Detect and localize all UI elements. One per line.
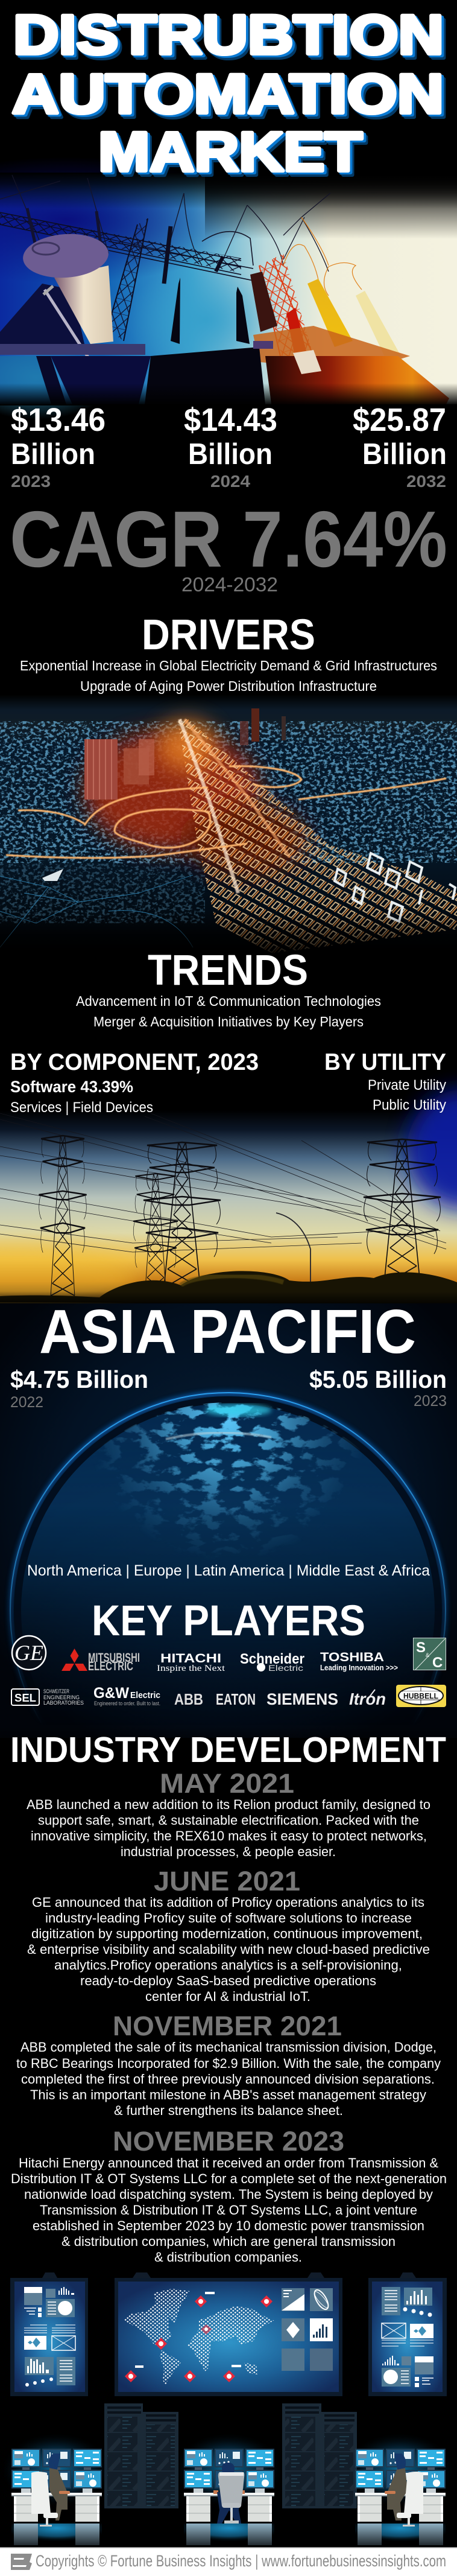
market size stats: $25.87	[353, 402, 446, 438]
title: MARKET	[98, 121, 362, 183]
market size stats: $14.43	[184, 402, 277, 438]
logo: S&C: S	[416, 1639, 426, 1656]
title	[12, 4, 444, 183]
panel: by utility: BY UTILITY	[324, 1049, 446, 1075]
development: June 2021: digitization by supporting modernization, continuous improvement,	[31, 1926, 423, 1941]
development: May 2021: innovative simplicity, the REX610 makes it easy to protect networks,	[31, 1828, 427, 1843]
development: May 2021: industrial processes, & people easier.	[121, 1844, 336, 1859]
asia pacific: ASIA PACIFIC	[39, 1297, 416, 1366]
drivers: Upgrade of Aging Power Distribution Infrastructure	[80, 678, 377, 694]
globe background	[0, 1303, 457, 1738]
trends: TRENDS	[148, 947, 308, 994]
server racks left	[104, 2403, 178, 2508]
logo: SEL	[11, 1688, 84, 1706]
market size stats	[11, 402, 447, 491]
asia pacific: 2023	[414, 1393, 447, 1410]
operator desk right	[346, 2434, 453, 2546]
logo: S&C	[414, 1638, 446, 1671]
asia pacific: 2022	[10, 1394, 43, 1411]
development: November 2021: This is an important milestone in ABB's asset management strategy	[30, 2087, 426, 2102]
logo: Siemens: SIEMENS	[266, 1690, 338, 1708]
panel: by utility: Public Utility	[373, 1097, 446, 1113]
logo: Hubbell	[396, 1685, 446, 1707]
logo: Toshiba: Leading Innovation >>>	[320, 1663, 398, 1672]
panel: by component: Services | Field Devices	[10, 1099, 153, 1116]
logo: G&W Electric: G&W	[93, 1685, 129, 1702]
server racks right	[282, 2403, 357, 2508]
development: November 2023: & distribution companies, which are general transmission	[61, 2234, 396, 2249]
development: May 2021: support safe, smart, & sustainable electrification. Packed with the	[38, 1813, 419, 1828]
logo: Hitachi: Inspire the Next	[157, 1664, 225, 1673]
logo: Eaton: EATON	[216, 1690, 256, 1708]
development: November 2021: & further strengthens its balance sheet.	[114, 2103, 343, 2118]
title: DISTRUBTION	[13, 4, 444, 66]
development: November 2021: completed the first of three previously announced division separations.	[21, 2072, 435, 2087]
development: November 2023: Distribution IT & OT Systems LLC for a complete set of the next-generation	[11, 2171, 447, 2186]
development: November 2023	[11, 2126, 447, 2265]
development: November 2023: NOVEMBER 2023	[113, 2126, 344, 2157]
logo: Mitsubishi Electric: ELECTRIC	[88, 1659, 133, 1673]
operator desk left	[2, 2434, 110, 2546]
development: June 2021: GE announced that its addition of Proficy operations analytics to its	[32, 1895, 424, 1910]
logo: S&C: &	[426, 1652, 429, 1658]
asia pacific: $4.75 Billion	[10, 1366, 148, 1393]
development: November 2023: Transmission & Distribution IT & OT Systems LLC, a joint venture	[40, 2202, 417, 2218]
development: November 2023: established in September 2023 by 10 domestic power transmission	[33, 2218, 424, 2233]
logo: SEL: SCHWEITZER	[43, 1688, 69, 1695]
panel: by component	[10, 1049, 259, 1116]
logo: Toshiba: TOSHIBA	[320, 1650, 384, 1664]
logo: G&W Electric	[93, 1685, 160, 1706]
logo: G&W Electric: Electric	[130, 1690, 160, 1700]
panel: by component: Software 43.39%	[10, 1078, 133, 1096]
development: June 2021: center for AI & industrial IoT.	[145, 1989, 310, 2004]
market size stats: Billion	[188, 438, 273, 471]
development: November 2021: NOVEMBER 2021	[113, 2011, 342, 2041]
logo: Toshiba	[320, 1650, 398, 1672]
market size stats: 2023	[11, 472, 51, 491]
development: May 2021: MAY 2021	[160, 1768, 294, 1799]
logo: Itron: Itron	[349, 1690, 386, 1708]
trends	[76, 947, 381, 1029]
logo: ABB: ABB	[174, 1690, 203, 1708]
logo: S&C: C	[432, 1655, 443, 1671]
logo: G&W Electric: Engineered to order. Built to last.	[94, 1700, 160, 1706]
logo: SEL: ENGINEERING	[43, 1694, 80, 1701]
footer	[0, 2547, 457, 2576]
development: May 2021	[27, 1768, 430, 1859]
development: June 2021: JUNE 2021	[154, 1866, 300, 1897]
panel: by component: BY COMPONENT, 2023	[10, 1049, 259, 1075]
logo: GE	[12, 1636, 46, 1670]
development: June 2021: ready-to-deploy SaaS-based predictive operations	[80, 1973, 376, 1988]
panel: by utility	[324, 1049, 446, 1113]
center wall screen: world map	[115, 2272, 342, 2396]
market size stats: Billion	[362, 438, 447, 471]
drivers: DRIVERS	[142, 611, 315, 659]
other regions: North America | Europe | Latin America | Middle East & Africa	[27, 1562, 430, 1579]
logo: Hubbell: HUBBELL	[403, 1691, 438, 1700]
asia pacific	[10, 1297, 447, 1411]
logo: Schneider Electric: Electric	[268, 1663, 303, 1673]
development: November 2021	[16, 2011, 441, 2118]
development: November 2021: ABB completed the sale of its mechanical transmission division, Dodge,	[20, 2040, 437, 2055]
key players heading: KEY PLAYERS	[92, 1597, 365, 1645]
development: June 2021: industry-leading Proficy suite of software solutions to increase	[45, 1910, 412, 1926]
market size stats: Billion	[11, 438, 95, 471]
market size stats: $13.46	[11, 402, 106, 438]
logo: GE: GE	[14, 1641, 43, 1665]
logo: Hitachi	[157, 1652, 225, 1673]
development: November 2023: nationwide load dispatching system. The System is being deployed by	[24, 2187, 433, 2202]
industry development heading: INDUSTRY DEVELOPMENT	[10, 1730, 446, 1770]
development: June 2021: analytics.Proficy operations analytics is a self-provisioning,	[54, 1957, 402, 1973]
development: November 2023: & distribution companies.	[154, 2250, 302, 2265]
operator desk center	[175, 2434, 282, 2546]
market size stats: 2032	[406, 472, 446, 491]
logo: Hitachi: HITACHI	[160, 1652, 221, 1665]
logo: Schneider Electric: Schneider	[240, 1651, 304, 1667]
panel: by utility: Private Utility	[368, 1077, 446, 1093]
trends: Merger & Acquisition Initiatives by Key Players	[93, 1014, 364, 1029]
power lines photo	[0, 1089, 457, 1315]
logo: SEL: SEL	[14, 1692, 36, 1704]
logo: Mitsubishi Electric	[61, 1649, 140, 1673]
development: November 2023: Hitachi Energy announced that it received an order from Transmission &	[19, 2155, 438, 2171]
development: November 2021: to RBC Bearings Incorporated for $2.9 Billion. With the sale, the company	[16, 2056, 441, 2071]
hero photo: substation at sunset	[0, 157, 457, 419]
development: June 2021	[27, 1866, 430, 2004]
trends: Advancement in IoT & Communication Technologies	[76, 993, 381, 1009]
logo: SEL: LABORATORIES	[43, 1700, 84, 1706]
right wall screen	[368, 2272, 447, 2396]
drivers	[20, 611, 437, 694]
CAGR: 2024-2032	[181, 573, 278, 596]
left wall screen	[10, 2272, 88, 2396]
logo: Mitsubishi Electric: MITSUBISHI	[88, 1651, 140, 1665]
development: May 2021: ABB launched a new addition to its Relion product family, designed to	[27, 1797, 430, 1812]
city photo: smart grid highways	[0, 695, 457, 956]
development: June 2021: & enterprise visibility and scalability with new cloud-based predictive	[27, 1942, 430, 1957]
asia pacific: $5.05 Billion	[309, 1366, 447, 1393]
title: AUTOMATION	[12, 63, 444, 125]
market size stats: 2024	[210, 472, 250, 491]
